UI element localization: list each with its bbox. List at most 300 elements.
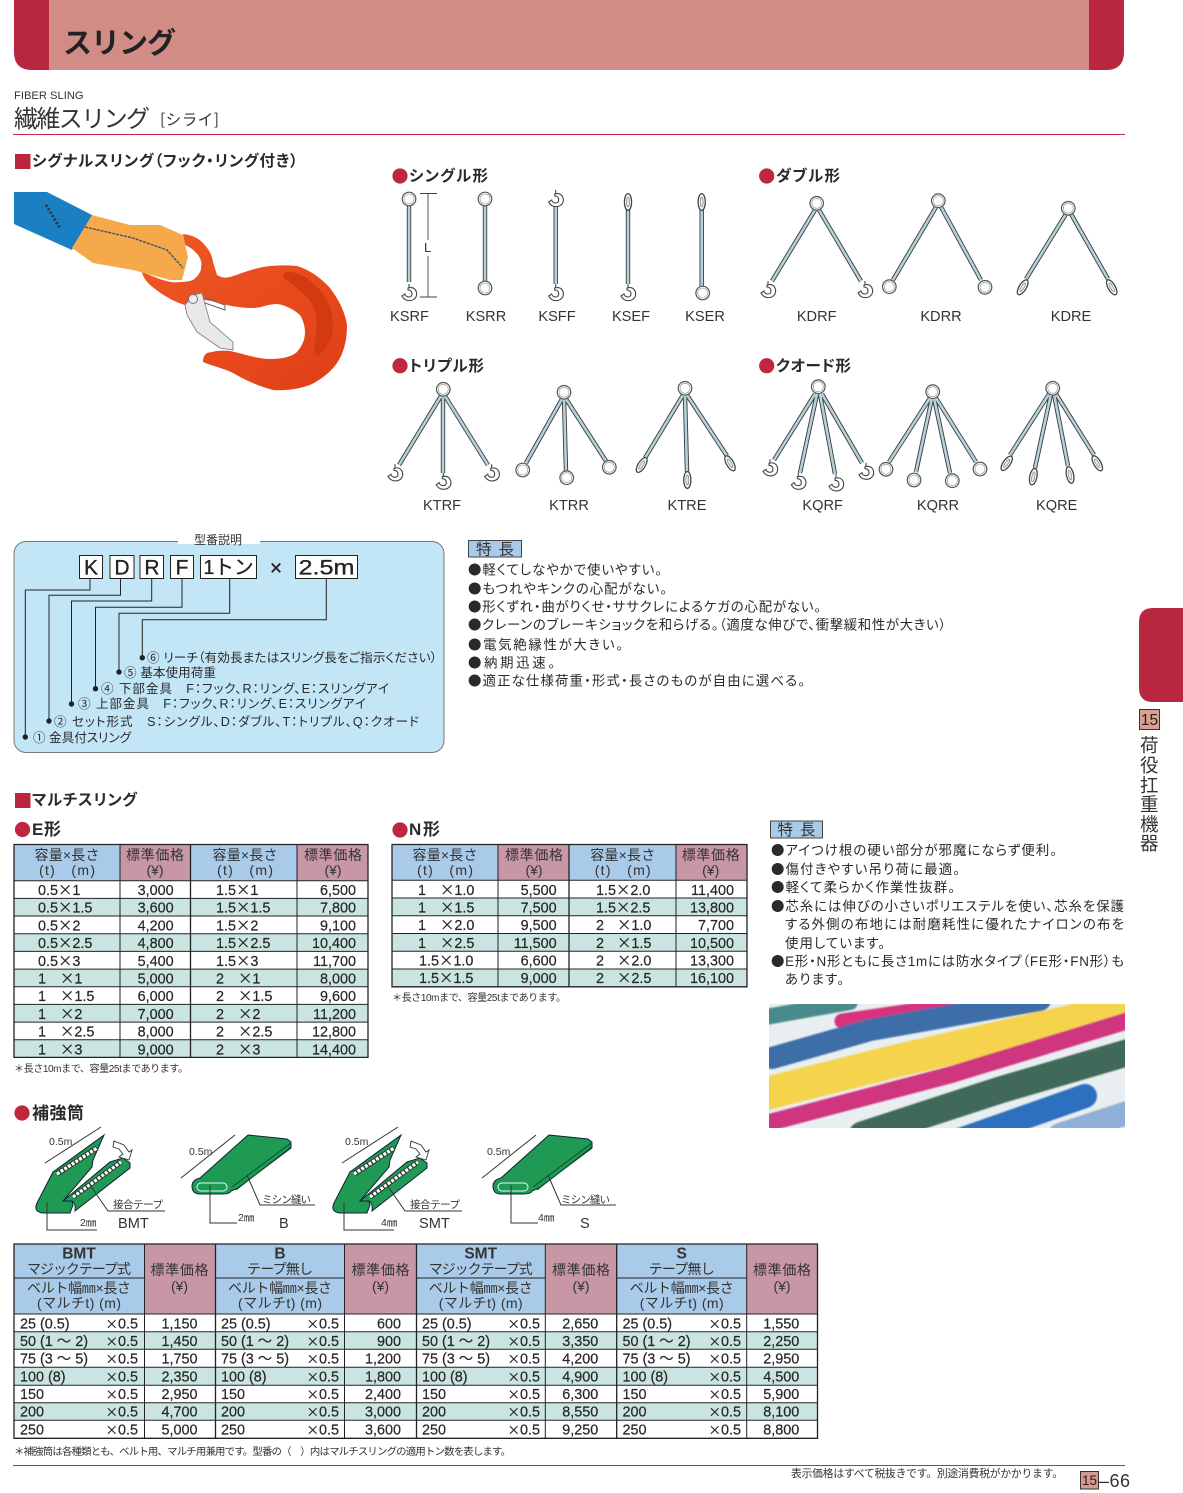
table rows — [20, 1313, 799, 1438]
table rows: 7,000 — [138, 1007, 174, 1023]
table rows: × — [60, 1003, 74, 1024]
table rows: 6,000 — [138, 989, 174, 1005]
table rows: 10,500 — [690, 936, 734, 952]
table rows: 9,000 — [138, 1042, 174, 1058]
features: signal sling: ●納期迅速。 — [468, 652, 555, 672]
table rows: 1 — [38, 1007, 46, 1023]
table rows: × — [617, 932, 631, 953]
table rows: 9,100 — [320, 918, 356, 934]
model explanation text — [33, 650, 437, 745]
heading: triple type: トリプル形 — [409, 357, 484, 375]
diagram: B sleeve: 0.5m — [189, 1146, 213, 1158]
labels: quad models: KQRR — [917, 498, 959, 514]
side tab: 15 — [1141, 712, 1158, 729]
table header: ベルト幅㎜×長さ — [630, 1280, 734, 1296]
table rows: 10,400 — [312, 936, 356, 952]
diagram: single slings: L — [424, 240, 431, 255]
table rows: 2 — [596, 953, 604, 969]
table rows: 5,400 — [138, 954, 174, 970]
table rows: 1.5×2.5 — [596, 897, 650, 918]
table rows: 1 — [38, 989, 46, 1005]
table header: ベルト幅㎜×長さ — [228, 1280, 332, 1296]
model explanation text: ① 金具付スリング — [33, 731, 132, 745]
table rows: 7,700 — [698, 918, 734, 934]
table rows: 1 — [418, 918, 426, 934]
table rows: 4,800 — [138, 936, 174, 952]
table rows: 200 — [422, 1405, 446, 1421]
table rows: 11,700 — [313, 954, 356, 970]
features: multi sling — [770, 821, 1124, 987]
code letters: 1トン — [204, 557, 254, 579]
code letters: × — [270, 557, 282, 580]
table header: 標準価格 — [682, 847, 740, 863]
heading: signal sling: シグナルスリング（フック・リング付き） — [32, 151, 298, 170]
code letters: F — [176, 556, 188, 580]
table rows: 1,200 — [365, 1352, 401, 1368]
table rows: 3,600 — [138, 901, 174, 917]
table rows: 9,500 — [521, 918, 557, 934]
table rows: × — [238, 1021, 252, 1042]
code letters — [84, 556, 354, 580]
table rows: ×0.5 — [708, 1331, 741, 1350]
diagram: S sleeve: ミシン縫い — [561, 1193, 610, 1206]
table rows: 3,350 — [562, 1334, 598, 1350]
table rows: 1 — [418, 901, 426, 917]
table rows: ×0.5 — [306, 1366, 339, 1385]
table rows: 2 — [74, 1007, 82, 1023]
diagram: B sleeve — [181, 1135, 315, 1232]
table rows: ×0.5 — [507, 1313, 540, 1332]
table header: 標準価格 — [126, 847, 184, 863]
table rows: 1.5 — [252, 989, 272, 1005]
table rows: ×0.5 — [306, 1419, 339, 1438]
table rows: 2 — [596, 936, 604, 952]
table header — [412, 847, 740, 878]
table header: (マルチt) (m) — [640, 1295, 724, 1311]
features: signal sling: ●軽くてしなやかで使いやすい。 — [468, 558, 662, 578]
table rows: 1.5×2.0 — [596, 879, 650, 900]
table rows: ×0.5 — [306, 1402, 339, 1421]
features: multi sling: する外側の布地には耐磨耗性に優れたナイロンの布を — [785, 917, 1124, 932]
table rows: 100 (8) — [20, 1369, 66, 1385]
table rows: 5,500 — [521, 883, 557, 899]
table rows: 9,000 — [521, 971, 557, 987]
heading: multi sling: マルチスリング — [32, 790, 138, 809]
table rows: × — [440, 879, 454, 900]
photo: colored multi slings — [769, 1004, 1125, 1128]
labels: quad models — [802, 498, 1078, 514]
table rows: 4,200 — [138, 918, 174, 934]
table rows: ×0.5 — [105, 1349, 138, 1368]
table rows: × — [238, 1003, 252, 1024]
diagram: SMT sleeve — [333, 1127, 462, 1232]
features: multi sling: ●E形・N形ともに長さ1mには防水タイプ（FE形・FN形）も — [771, 950, 1124, 970]
table rows: 11,400 — [691, 883, 734, 899]
table rows: 2.0 — [631, 953, 651, 969]
table rows: × — [60, 1038, 74, 1059]
diagram: BMT sleeve: 0.5m — [49, 1136, 73, 1148]
table rows: 3 — [74, 1042, 82, 1058]
table rows: × — [617, 914, 631, 935]
table rows: 1,550 — [763, 1316, 799, 1332]
table rows: 1 — [38, 1042, 46, 1058]
table rows: 2,950 — [763, 1352, 799, 1368]
table header: BMT — [62, 1246, 96, 1262]
table rows: 5,000 — [138, 972, 174, 988]
table rows: 1.5×1 — [216, 879, 258, 900]
table rows: 4,700 — [161, 1405, 198, 1421]
labels: double models: KDRF — [797, 309, 837, 325]
table rows: 4,500 — [763, 1369, 799, 1385]
table rows: ×0.5 — [708, 1419, 741, 1438]
labels: triple models — [423, 498, 707, 514]
labels: single models: KSEF — [612, 309, 650, 325]
table rows: 16,100 — [690, 971, 734, 987]
features: signal sling — [468, 540, 946, 690]
table header: (¥) — [372, 1278, 389, 1294]
diagram: SMT sleeve: 0.5m — [345, 1136, 369, 1148]
table rows: 1,450 — [161, 1334, 198, 1350]
table rows: 3,600 — [365, 1422, 401, 1438]
table rows: × — [440, 914, 454, 935]
features: multi sling: ●軽くて柔らかく作業性抜群。 — [771, 876, 955, 896]
leader dots — [23, 655, 145, 740]
section title: fiber sling: 繊維スリング — [14, 99, 150, 134]
table rows: 11,200 — [313, 1007, 356, 1023]
table: N type — [392, 844, 747, 988]
table rows: ×0.5 — [306, 1349, 339, 1368]
table rows: 1.5×2.5 — [216, 932, 270, 953]
table header: テープ無し — [247, 1261, 313, 1277]
table header: (¥) — [702, 862, 719, 878]
table header: (t) (m) — [39, 862, 95, 878]
heading: N type — [392, 820, 440, 839]
heading: quad type: クオード形 — [776, 357, 851, 375]
note: N type: ＊長さ10mまで、容量25tまであります。 — [392, 991, 566, 1004]
table header: 容量×長さ — [412, 847, 478, 863]
diagram: S sleeve: 0.5m — [487, 1146, 511, 1158]
table rows: 7,500 — [521, 901, 557, 917]
table header: 容量×長さ — [590, 847, 655, 863]
table rows: 8,000 — [138, 1025, 174, 1041]
table rows: 13,300 — [690, 953, 734, 969]
table header: ベルト幅㎜×長さ — [27, 1280, 131, 1296]
table rows: 50 (1 ～ 2) — [422, 1334, 490, 1350]
section title: fiber sling — [14, 90, 219, 134]
table rows — [38, 879, 356, 1059]
features: signal sling: ●もつれやキンクの心配がない。 — [468, 578, 667, 598]
table rows: ×0.5 — [507, 1366, 540, 1385]
diagram: S sleeve: 4㎜ — [538, 1212, 555, 1224]
table header: (マルチt) (m) — [238, 1295, 322, 1311]
table header: テープ無し — [649, 1261, 715, 1277]
table rows: ×0.5 — [105, 1313, 138, 1332]
table header: 標準価格 — [352, 1262, 410, 1278]
note: E type: ＊長さ10mまで、容量25tまであります。 — [14, 1062, 188, 1075]
table header: ベルト幅㎜×長さ — [429, 1280, 533, 1296]
table rows: 8,550 — [562, 1405, 598, 1421]
features: multi sling: ●傷付きやすい吊り荷に最適。 — [771, 858, 960, 878]
table rows: 4,200 — [562, 1352, 598, 1368]
section title: fiber sling: [シライ] — [160, 108, 219, 130]
table rows: 1 — [418, 883, 426, 899]
table rows: ×0.5 — [507, 1384, 540, 1403]
table rows: 1 — [252, 972, 260, 988]
labels: triple models: KTRR — [549, 498, 589, 514]
heading: double type: ダブル形 — [776, 166, 840, 185]
table rows — [418, 879, 734, 988]
table rows: 2,350 — [161, 1369, 198, 1385]
table header: (¥) — [171, 1278, 188, 1294]
heading: E type: E形 — [32, 820, 61, 839]
title: スリング — [63, 20, 176, 62]
table rows: ×0.5 — [306, 1331, 339, 1350]
table rows: 1.5 — [74, 989, 94, 1005]
table rows: 9,250 — [562, 1422, 598, 1438]
table rows: 1.0 — [454, 883, 474, 899]
table rows: 1,750 — [161, 1352, 198, 1368]
table rows: 13,800 — [690, 901, 734, 917]
table rows: 25 (0.5) — [221, 1316, 271, 1332]
table header: (t) (m) — [417, 862, 473, 878]
table rows: 4,900 — [562, 1369, 598, 1385]
table header: 標準価格 — [150, 1262, 208, 1278]
table rows: 1 — [418, 936, 426, 952]
panel: model number explanation — [14, 532, 444, 752]
section title: fiber sling: FIBER SLING — [14, 90, 84, 102]
diagram: triple slings — [388, 382, 737, 489]
model explanation text: ③ 上部金具 F：フック、R：リング、E：スリングアイ — [78, 697, 366, 711]
diagram: B sleeve: 2㎜ — [238, 1212, 255, 1224]
table rows: ×0.5 — [105, 1402, 138, 1421]
table rows: 150 — [422, 1387, 446, 1403]
table rows: 1.5 — [631, 936, 651, 952]
features: signal sling: ●電気絶縁性が大きい。 — [468, 634, 623, 654]
table header: (¥) — [773, 1278, 791, 1294]
table rows: 2.5 — [252, 1025, 272, 1041]
side tab — [1139, 608, 1183, 856]
table rows: 2 — [596, 971, 604, 987]
table header: (¥) — [324, 862, 342, 878]
diagram: BMT sleeve: BMT — [118, 1216, 149, 1232]
table rows: ×0.5 — [306, 1313, 339, 1332]
note: reinforcement sleeves: ＊補強筒は各種類とも、ベルト用、マルチ用兼用です。型番の（ ）内はマルチスリングの適用トン数を表します。 — [14, 1445, 511, 1458]
table rows: 25 (0.5) — [622, 1316, 672, 1332]
table header — [34, 847, 362, 878]
model explanation text: ⑥ リーチ（有効長またはスリング長をご指示ください） — [147, 650, 437, 665]
table rows: × — [238, 985, 252, 1006]
table header: マジックテープ式 — [27, 1261, 131, 1277]
model explanation text: ② セット形式 S：シングル、D：ダブル、T：トリプル、Q：クオード — [54, 714, 419, 729]
table rows: 1.0 — [631, 918, 651, 934]
table header: 容量×長さ — [212, 847, 278, 863]
table rows: 1.5×1.5 — [419, 967, 473, 988]
diagram: BMT sleeve — [36, 1127, 165, 1232]
table rows: × — [60, 968, 74, 988]
labels: single models: KSFF — [538, 309, 576, 325]
table rows: 2,950 — [161, 1387, 198, 1403]
table header — [27, 1246, 811, 1311]
table rows: × — [238, 1038, 252, 1059]
table rows: 2 — [216, 972, 224, 988]
table rows: 2 — [216, 1042, 224, 1058]
table rows: ×0.5 — [105, 1366, 138, 1385]
diagram: B sleeve: B — [279, 1216, 289, 1232]
table rows: 2.5 — [454, 936, 474, 952]
code letters: K — [84, 556, 98, 580]
table rows: 1.5×1.5 — [216, 897, 270, 918]
code boxes — [80, 556, 358, 578]
table rows: 1 — [38, 1025, 46, 1041]
features: signal sling: 特長 — [476, 540, 514, 558]
table rows: 5,900 — [763, 1387, 799, 1403]
table rows: 25 (0.5) — [20, 1316, 70, 1332]
table rows: 2 — [596, 918, 604, 934]
table: reinforcement sleeves — [14, 1244, 818, 1438]
table rows: 25 (0.5) — [422, 1316, 472, 1332]
table header: (¥) — [146, 862, 164, 878]
features: multi sling: 特長 — [778, 821, 816, 839]
table rows: 1,800 — [365, 1369, 401, 1385]
model explanation text: ④ 下部金具 F：フック、R：リング、E：スリングアイ — [101, 682, 389, 696]
table rows: 7,800 — [320, 901, 356, 917]
features: multi sling: あります。 — [785, 972, 844, 987]
table rows: 9,600 — [320, 989, 356, 1005]
table header: (¥) — [525, 862, 543, 878]
table rows: 0.5×1 — [38, 879, 80, 900]
table rows: ×0.5 — [708, 1313, 741, 1332]
table rows: 900 — [377, 1334, 401, 1350]
table header: 容量×長さ — [34, 847, 100, 863]
labels: single models — [390, 309, 725, 325]
table rows: 6,600 — [521, 953, 557, 969]
heading: reinforcement sleeves: 補強筒 — [32, 1103, 84, 1123]
table rows: 100 (8) — [221, 1369, 267, 1385]
labels: quad models: KQRF — [802, 498, 843, 514]
table rows: 2 — [216, 1007, 224, 1023]
table header: B — [274, 1246, 286, 1262]
features: signal sling: ●適正な仕様荷重・形式・長さのものが自由に選べる。 — [468, 670, 805, 690]
table rows: 0.5×2 — [38, 914, 80, 935]
table rows: × — [440, 897, 454, 918]
diagram: single slings — [402, 190, 710, 301]
table rows: 2.0 — [454, 918, 474, 934]
table rows: 14,400 — [312, 1042, 356, 1058]
table rows: 2 — [252, 1007, 260, 1023]
table rows: 0.5×3 — [38, 950, 80, 971]
table header: (マルチt) (m) — [439, 1295, 523, 1311]
table rows: 75 (3 ～ 5) — [221, 1352, 289, 1368]
page number — [1080, 1471, 1130, 1491]
table rows: ×0.5 — [105, 1331, 138, 1350]
table rows: 2.5 — [74, 1025, 94, 1041]
table rows: 250 — [221, 1422, 245, 1438]
table rows: 150 — [221, 1387, 245, 1403]
leader lines — [25, 578, 326, 737]
table rows: × — [60, 1021, 74, 1042]
labels: quad models: KQRE — [1036, 498, 1078, 514]
table rows: 2 — [216, 989, 224, 1005]
model explanation text: ⑤ 基本使用荷重 — [124, 665, 216, 680]
photo: hook with sling — [14, 192, 347, 390]
table header: (t) (m) — [217, 862, 273, 878]
labels: single models: KSRR — [466, 309, 506, 325]
table rows: × — [617, 967, 631, 988]
table header: (¥) — [572, 1278, 590, 1294]
table rows: 75 (3 ～ 5) — [20, 1352, 88, 1368]
page number: –66 — [1099, 1471, 1130, 1491]
table rows: 50 (1 ～ 2) — [622, 1334, 690, 1350]
table rows: ×0.5 — [708, 1384, 741, 1403]
table header: 標準価格 — [304, 847, 362, 863]
header band — [14, 0, 1124, 70]
table rows: 1.5×3 — [216, 950, 258, 971]
table rows: 200 — [622, 1405, 647, 1421]
table rows: 5,000 — [161, 1422, 198, 1438]
labels: triple models: KTRF — [423, 498, 461, 514]
table rows: × — [238, 968, 252, 988]
diagram: SMT sleeve: SMT — [419, 1216, 450, 1232]
table header: (マルチt) (m) — [37, 1295, 121, 1311]
heading: single type: シングル形 — [409, 166, 488, 185]
table rows: 100 (8) — [422, 1369, 468, 1385]
code letters: R — [144, 556, 160, 580]
table rows: 100 (8) — [622, 1369, 668, 1385]
labels: single models: KSER — [685, 309, 725, 325]
diagram: quad slings — [763, 380, 1105, 491]
table rows: ×0.5 — [507, 1331, 540, 1350]
table rows: 0.5×2.5 — [38, 932, 92, 953]
code letters: 2.5m — [298, 556, 354, 580]
table rows: ×0.5 — [507, 1349, 540, 1368]
table rows: 2,650 — [562, 1316, 598, 1332]
table rows: 3 — [252, 1042, 260, 1058]
table rows: × — [440, 932, 454, 953]
table rows: 50 (1 ～ 2) — [221, 1334, 289, 1350]
table rows: 8,100 — [763, 1405, 799, 1421]
page number: 15 — [1082, 1473, 1097, 1488]
table rows: ×0.5 — [708, 1366, 741, 1385]
heading: E type — [15, 820, 61, 839]
code letters: D — [114, 556, 130, 580]
table rows: 6,500 — [320, 883, 356, 899]
table rows: 1.5×2 — [216, 914, 258, 935]
table rows: 200 — [221, 1405, 245, 1421]
diagram: BMT sleeve: 2㎜ — [80, 1217, 97, 1229]
table rows: ×0.5 — [105, 1384, 138, 1403]
table header: 標準価格 — [753, 1262, 811, 1278]
features: signal sling: ●形くずれ・曲がりくせ・ササクレによるケガの心配がない。 — [468, 596, 821, 616]
table rows: 200 — [20, 1405, 44, 1421]
table rows: 1 — [74, 972, 82, 988]
table rows: 250 — [20, 1422, 44, 1438]
table rows: ×0.5 — [507, 1402, 540, 1421]
table header: マジックテープ式 — [429, 1261, 533, 1277]
table rows: 50 (1 ～ 2) — [20, 1334, 88, 1350]
table rows: 8,000 — [320, 972, 356, 988]
table header: S — [677, 1246, 687, 1262]
table rows: 12,800 — [312, 1025, 356, 1041]
table rows: 8,800 — [763, 1422, 799, 1438]
table rows: 75 (3 ～ 5) — [622, 1352, 690, 1368]
table rows: ×0.5 — [105, 1419, 138, 1438]
diagram: S sleeve: S — [580, 1216, 590, 1232]
labels: single models: KSRF — [390, 309, 429, 325]
labels: double models: KDRE — [1051, 309, 1092, 325]
table rows: × — [617, 949, 631, 970]
footer note: 表示価格はすべて税抜きです。別途消費税がかかります。 — [791, 1466, 1063, 1480]
features: signal sling: ●クレーンのブレーキショックを和らげる。（適度な伸びで、衝撃緩和性が大きい） — [468, 614, 946, 634]
